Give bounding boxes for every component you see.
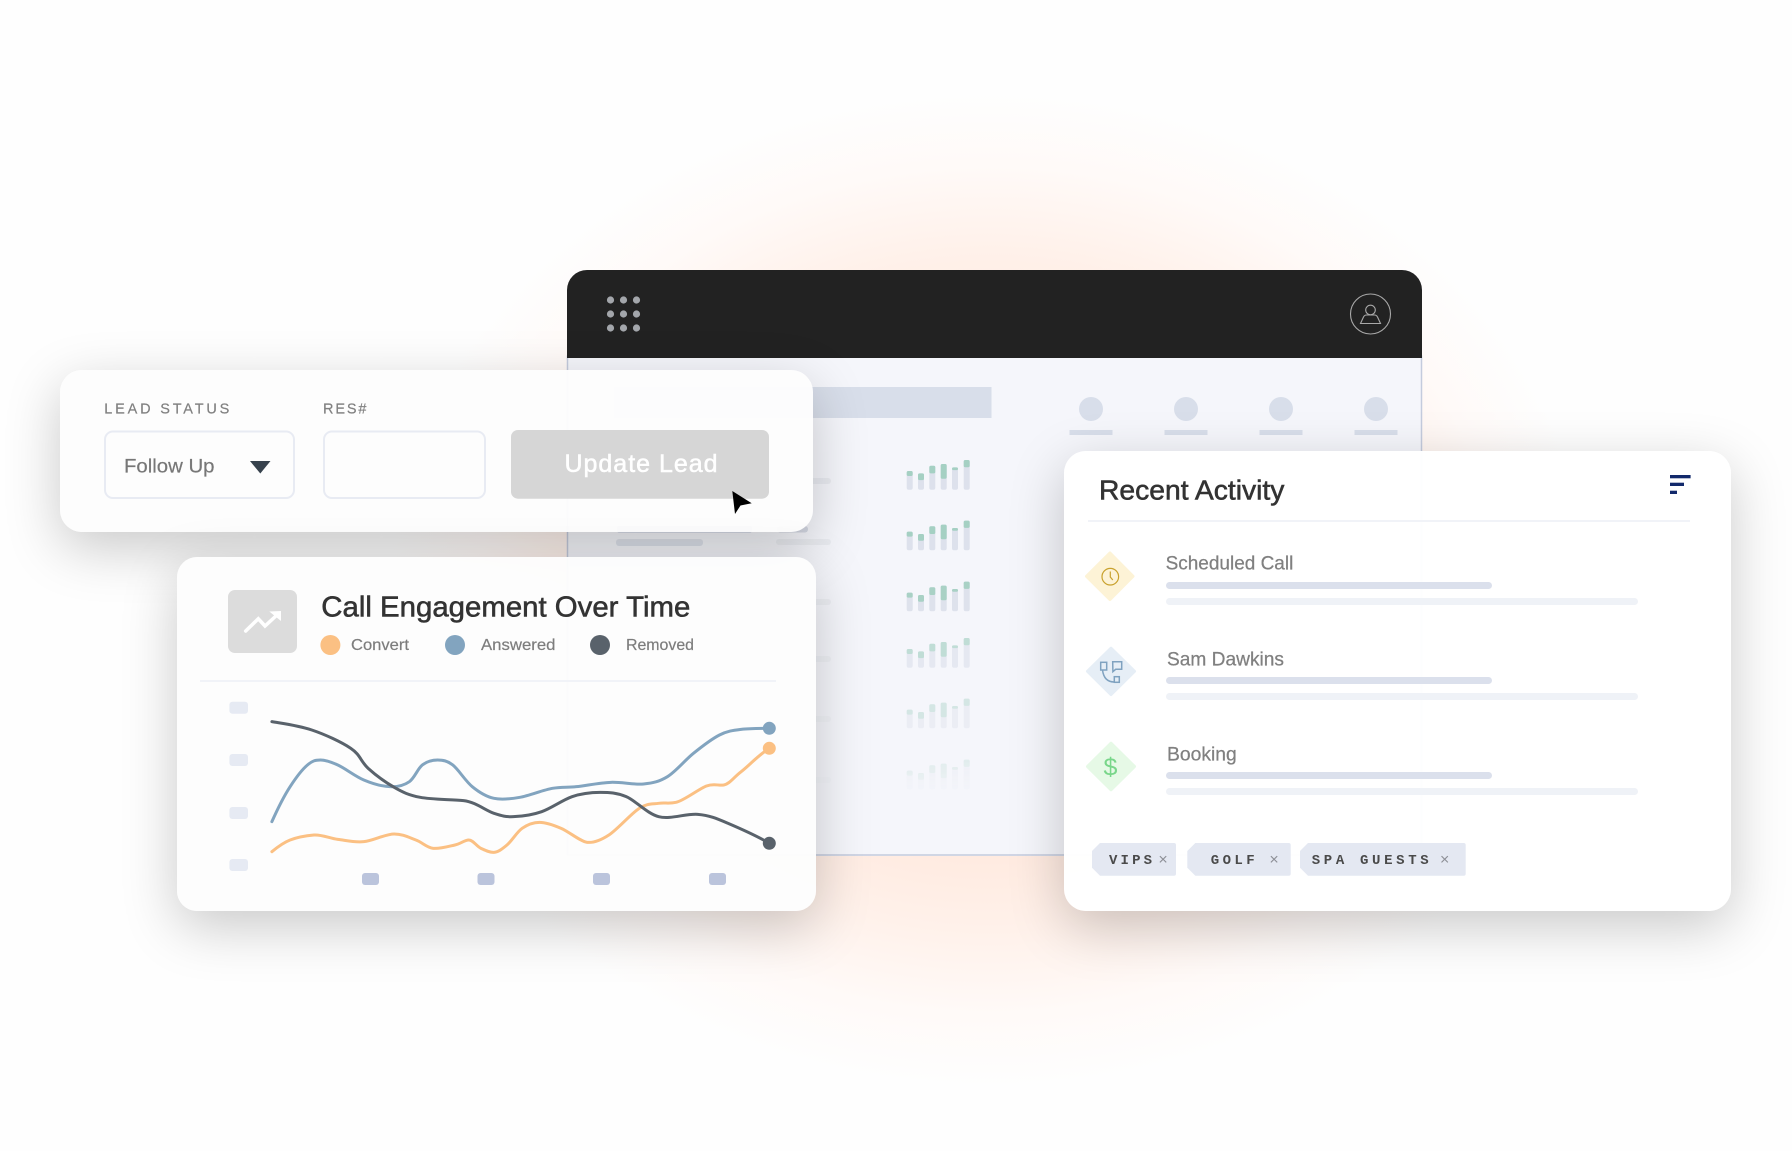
- tag: GOLF: ×: [1269, 852, 1279, 868]
- line end dots: [763, 722, 776, 850]
- input: res number: [324, 432, 485, 498]
- chart: x axis ticks: [362, 873, 726, 885]
- line: removed: [272, 722, 769, 843]
- item: scheduled call: Scheduled Call: [1166, 552, 1293, 574]
- button: update lead: Update Lead: [564, 450, 718, 478]
- icon: phone: [1088, 648, 1134, 694]
- chart: line series: [272, 722, 769, 852]
- window header bar: [567, 270, 1422, 358]
- item: booking: Booking: [1167, 744, 1237, 766]
- search bar placeholder: [614, 387, 992, 418]
- column headers: [1070, 397, 1398, 435]
- tag: GOLF: [1187, 843, 1291, 876]
- icon: dollar: $: [1104, 754, 1118, 782]
- icon: mouse cursor: [732, 491, 752, 514]
- line: answered: [272, 728, 769, 822]
- panel: lead status form: [60, 370, 813, 532]
- panel: recent activity: [1064, 451, 1731, 911]
- item: sam dawkins: [1088, 648, 1638, 700]
- legend: Removed: [626, 637, 694, 654]
- tag: SPA GUESTS: SPA GUESTS: [1312, 853, 1429, 869]
- legend: Answered: [481, 637, 556, 654]
- chart: y axis ticks: [229, 702, 248, 871]
- tag: SPA GUESTS: ×: [1440, 852, 1449, 868]
- icon: filter: [1670, 475, 1691, 494]
- mini bar charts column: [907, 460, 970, 789]
- icon: clock: [1086, 553, 1133, 600]
- heading: call engagement over time: Call Engagement Over Time: [321, 592, 690, 624]
- icon: user avatar: [1350, 294, 1390, 334]
- panel: call engagement chart: [177, 557, 816, 911]
- dropdown: follow up: Follow Up: [124, 455, 215, 477]
- icon: app grid: [607, 296, 640, 332]
- tag: GOLF: GOLF: [1211, 853, 1255, 869]
- item: sam dawkins: Sam Dawkins: [1167, 649, 1284, 671]
- tag: VIPS: VIPS: [1109, 853, 1152, 869]
- label: lead status: LEAD STATUS: [104, 402, 229, 418]
- window body outline: [568, 356, 1422, 855]
- dropdown: follow up: [105, 432, 294, 498]
- item: booking: [1088, 743, 1638, 795]
- line: convert: [272, 748, 769, 852]
- icon: dollar: [1088, 743, 1134, 790]
- legend: Convert: [351, 637, 410, 654]
- tag: VIPS: ×: [1158, 852, 1168, 868]
- tag: VIPS: [1092, 843, 1176, 876]
- tag: SPA GUESTS: [1300, 843, 1466, 876]
- button: update lead: [511, 430, 769, 499]
- label: res number: RES#: [323, 402, 366, 418]
- panel: dashboard window: [567, 270, 1422, 856]
- legend: [320, 635, 694, 655]
- heading: recent activity: Recent Activity: [1099, 474, 1285, 505]
- item: scheduled call: [1086, 552, 1638, 605]
- icon: trending up tile: [228, 590, 297, 653]
- table rows placeholders: [616, 478, 831, 783]
